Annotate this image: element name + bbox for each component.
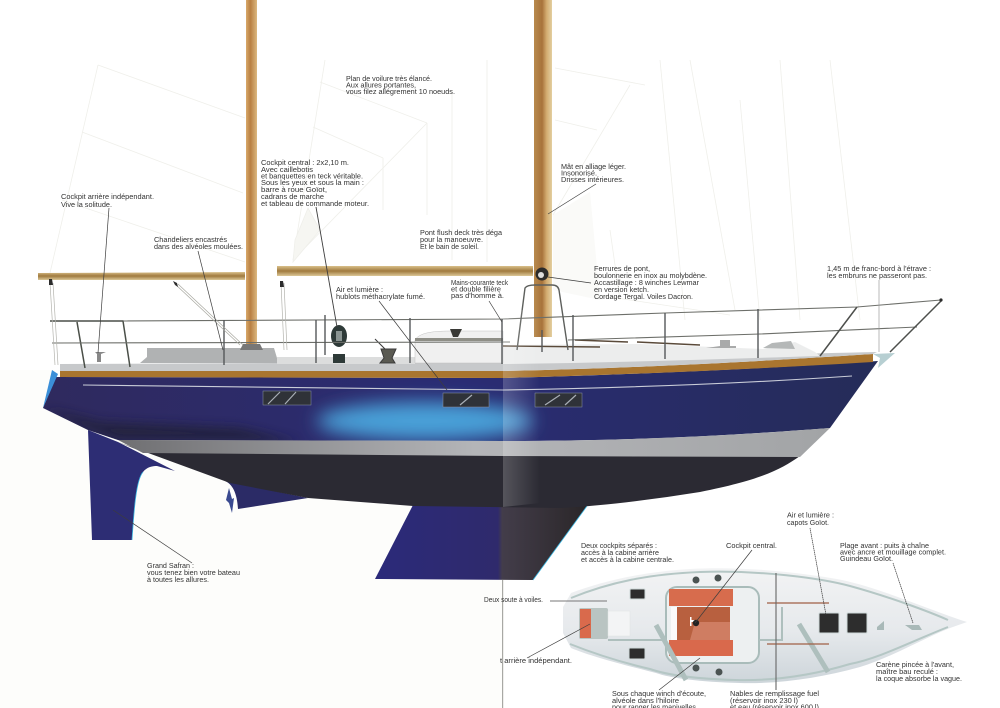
plan wheel (690, 617, 699, 626)
forward hatch (763, 341, 795, 349)
blue topsides (43, 361, 878, 441)
callout: nables (730, 689, 821, 708)
callout: pont flush deck: pour la manoeuvre. (420, 235, 483, 244)
callout: cockpit central: cadrans de marche (261, 192, 324, 201)
callout: grand safran: vous tenez bien votre bateau (147, 568, 240, 577)
callout: grand safran: Grand Safran : (147, 561, 194, 570)
keel edge (533, 506, 587, 580)
callout: cockpit central: barre à roue Goïot, (261, 185, 327, 194)
callout: deux cockpits: et accès à la cabine centrale. (581, 555, 674, 564)
propeller (226, 488, 234, 513)
plan foredeck fittings (877, 621, 922, 630)
callout: ferrures: boulonnerie en inox au molybdène. (594, 271, 707, 280)
callout: plage avant: Guindeau Goïot. (840, 554, 893, 563)
callout: cockpit central plan: Cockpit central. (726, 541, 777, 550)
callout: chandeliers (154, 235, 243, 251)
teak rubbing strake (60, 354, 873, 378)
callout: cockpit arriere (61, 192, 154, 209)
callout: carene: Carène pincée à l'avant, (876, 660, 954, 669)
hull: side elevation (43, 353, 895, 580)
callout: cockpit central: et banquettes en teck véritable. (261, 172, 363, 180)
callout: deux cockpits: accès à la cabine arrière (581, 548, 659, 557)
callout: nables: Nables de remplissage fuel (730, 689, 819, 698)
sails: faint sail plan lines (50, 60, 860, 320)
cabin top (277, 357, 415, 364)
leader lines (98, 184, 913, 690)
blue highlight (317, 402, 533, 440)
callout: franc-bord: 1,45 m de franc-bord à l'étrave : (827, 264, 931, 273)
plan helm frame (671, 607, 677, 640)
skeg (225, 481, 308, 509)
callout: hublots: Air et lumière : (336, 285, 383, 294)
callout: plan de voilure: vous filez allégrement 10 noeuds. (346, 87, 455, 96)
aft cockpit coaming (415, 331, 503, 363)
callout: deux cockpits (581, 541, 674, 564)
plan hull outline (563, 568, 967, 683)
callout: cockpit arriere: Cockpit arrière indépendant. (61, 192, 154, 201)
callout: cockpit central: Avec caillebotis (261, 165, 313, 174)
plan cockpit seat: port (669, 589, 733, 606)
foredeck teak strips (503, 340, 700, 347)
callout: winch: alvéole dans l'hiloire (612, 696, 679, 705)
rudder edge (132, 472, 143, 540)
callout: chandeliers: Chandeliers encastrés (154, 235, 227, 244)
callout: pont flush deck: Et le bain de soleil. (420, 242, 479, 251)
callout: plan de voilure (346, 74, 455, 96)
plan hatches (629, 589, 867, 659)
deck strip (60, 352, 877, 371)
mast end caps (49, 279, 943, 302)
callout: pont flush deck: Pont flush deck très déga (420, 228, 503, 237)
callout: mat: Mât en alliage léger. (561, 162, 626, 171)
callout: carene: la coque absorbe la vague. (876, 674, 962, 683)
callout: pont flush deck (420, 228, 503, 251)
plan aft cockpit (579, 608, 608, 639)
callout: mains-courantes (451, 278, 508, 300)
winch (375, 339, 396, 363)
transom edge (43, 370, 58, 408)
callout: plan de voilure: Aux allures portantes, (346, 80, 416, 90)
callout: cockpit central: Sous les yeux et sous la main : (261, 178, 364, 187)
mast fitting: round gooseneck (536, 268, 548, 280)
callout: mains-courantes: Mains-courante teck (451, 278, 508, 287)
callout: chandeliers: dans des alvéoles moulées. (154, 242, 243, 251)
callout: mat (561, 162, 626, 184)
boom: aft (38, 272, 245, 280)
plan winches (692, 574, 722, 676)
plan deck panel (608, 611, 630, 636)
callout: cockpit central: et tableau de commande moteur. (261, 199, 369, 208)
callout: plan de voilure: Plan de voilure très élancé. (346, 74, 432, 83)
callout: grand safran (147, 561, 240, 584)
callout: ferrures: Cordage Tergal. Voiles Dacron. (594, 292, 693, 301)
mooring fitting (706, 340, 736, 348)
callout: capots (787, 510, 834, 527)
mast step (240, 344, 263, 350)
aft coachroof (140, 348, 280, 363)
callout: mains-courantes: et double filière (451, 284, 501, 294)
boot stripe (118, 428, 830, 457)
callout: winch: Sous chaque winch d'écoute, (612, 689, 706, 698)
mast: aft mizzen (246, 0, 257, 344)
callout: mat: Insonorisé. (561, 168, 597, 178)
keel (375, 505, 587, 580)
plan cockpit well sole (690, 622, 730, 640)
callout: franc-bord: les embruns ne passeront pas. (827, 271, 927, 280)
callout: plage avant (840, 541, 946, 563)
callout: capots: Air et lumière : (787, 510, 834, 520)
callout: hublots: hublots méthacrylate fumé. (336, 292, 425, 301)
callout: mains-courantes: pas d'homme à. (451, 291, 504, 300)
callout: soutes a voiles: Deux soute à voiles. (484, 595, 543, 604)
callout: winch (612, 689, 706, 708)
callout: ferrures: Ferrures de pont, (594, 264, 650, 273)
boom: main (277, 266, 533, 276)
rails: pulpits, lifelines and stanchions (50, 283, 941, 368)
callout: cockpit central: Cockpit central : 2x2,10 m. (261, 158, 349, 167)
callout: cockpit arriere plan: t arrière indépendant. (500, 656, 572, 665)
plan side decks (608, 607, 828, 680)
callout: ferrures (594, 264, 707, 301)
callout: mat: Drisses intérieures. (561, 175, 624, 184)
callout: nables: (réservoir inox 230 l) (730, 696, 798, 705)
stern fitting (95, 352, 106, 362)
callout: plage avant: avec ancre et mouillage complet. (840, 548, 946, 556)
callout: deux cockpits: Deux cockpits séparés : (581, 541, 657, 550)
callout: carene: maître bau reculé : (876, 667, 938, 676)
bow edge (873, 353, 895, 368)
foredeck (503, 342, 820, 364)
callout: capots: capots Goïot. (787, 518, 829, 527)
callout: cockpit arriere: Vive la solitude. (61, 200, 112, 209)
underbody (118, 442, 800, 508)
white hull line (83, 376, 852, 390)
dorade cleat (450, 329, 462, 337)
callout: carene (876, 660, 962, 683)
callout: ferrures: en version ketch. (594, 285, 649, 294)
portlights (263, 391, 582, 407)
callout: franc-bord (827, 264, 931, 280)
rudder (88, 430, 175, 540)
callout: cockpit central (261, 158, 369, 208)
plan teak handrails (767, 603, 829, 644)
plan cockpit well (677, 607, 730, 640)
plan central cockpit coaming (666, 587, 759, 663)
plan toe rail (570, 572, 948, 680)
deck plan: top view (563, 568, 967, 683)
callout: ferrures: Accastillage : 8 winches Lewmar (594, 278, 699, 287)
plan cockpit seat: starboard (669, 640, 733, 656)
callout: hublots (336, 285, 425, 301)
mast: main (534, 0, 552, 337)
dark shade above boot line (52, 410, 289, 440)
gutter fold (502, 310, 540, 708)
deck side view (60, 325, 877, 371)
callout: plage avant: Plage avant : puits à chaîne (840, 541, 929, 550)
portlight reflections (268, 392, 576, 405)
binnacle winch (331, 325, 347, 363)
callout: grand safran: à toutes les allures. (147, 575, 209, 584)
